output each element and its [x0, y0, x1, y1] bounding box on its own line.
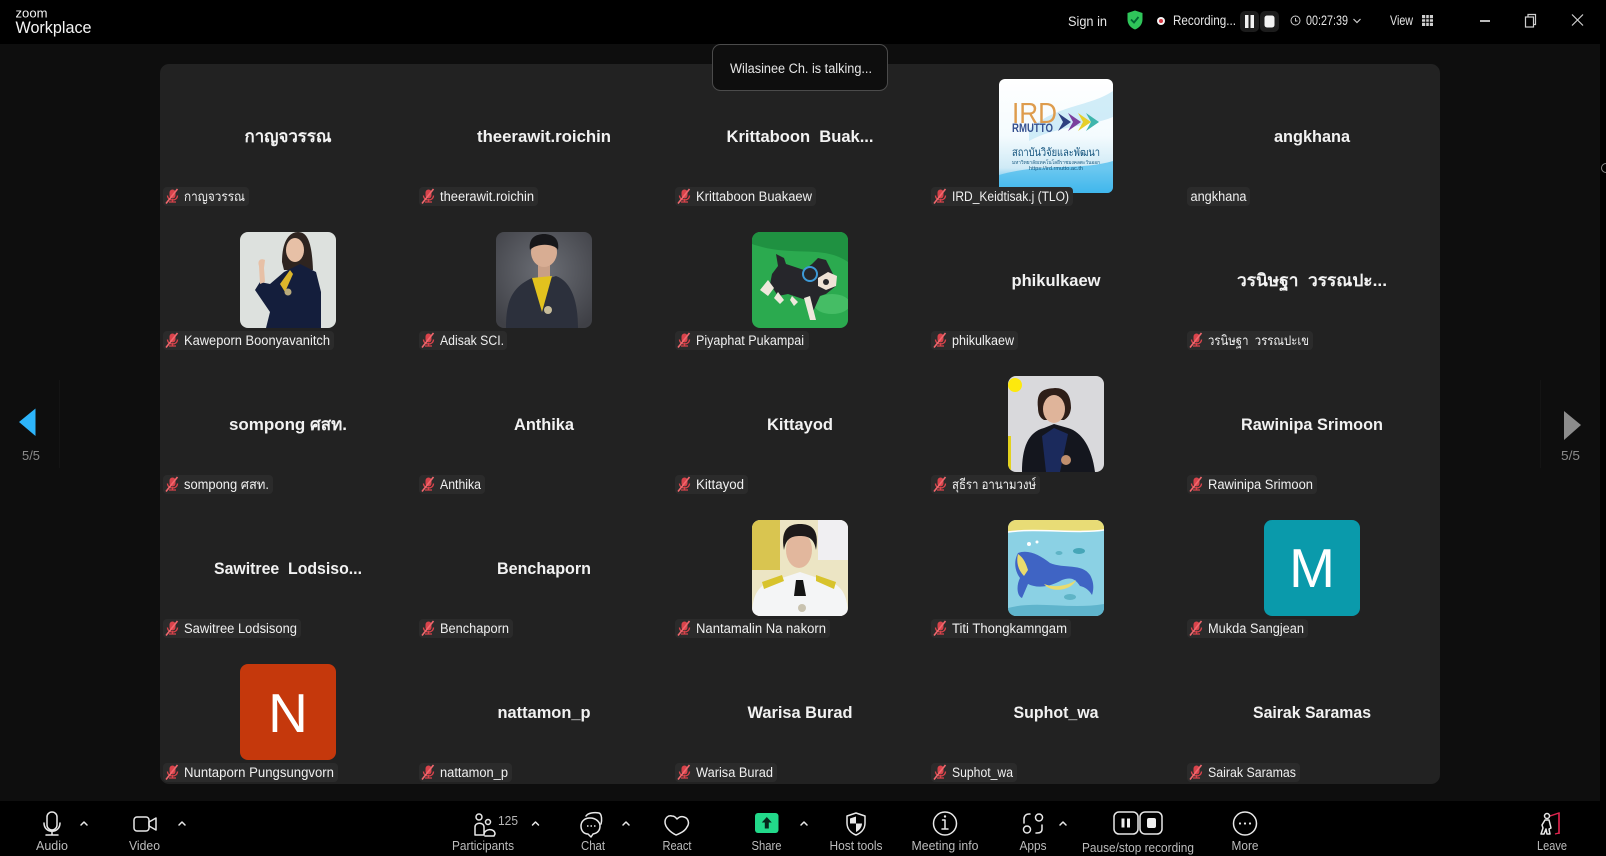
tile: Rawinipa Srimoon — [1187, 415, 1383, 494]
logo: zoom Workplace — [16, 6, 92, 37]
tile: Nantamalin Na nakorn — [675, 520, 848, 638]
tile: สุธีรา อานามวงษ์ — [931, 376, 1104, 494]
sign in: Sign in — [1068, 14, 1107, 29]
tile: กาญจวรรณ — [163, 127, 332, 206]
tile: nattamon_p — [419, 703, 590, 782]
avatar: IRD RMUTTO logo: IRD — [1012, 98, 1057, 130]
participants button: Participants — [452, 838, 514, 853]
logo: zoom Workplace: Workplace — [16, 18, 92, 37]
callout: who is talking — [712, 44, 888, 90]
tile: sompong ศสท.: sompong ศสท. — [184, 477, 269, 492]
react button: React — [662, 838, 692, 853]
avatar: letter M: M — [1289, 537, 1335, 599]
tile: Suphot_wa: Suphot_wa — [1014, 703, 1099, 722]
tile: Piyaphat Pukampai: Piyaphat Pukampai — [696, 333, 804, 348]
meeting info button — [912, 812, 978, 853]
avatar: IRD RMUTTO logo: สถาบันวิจัยและพัฒนา — [1012, 147, 1100, 159]
tile: angkhana: angkhana — [1274, 127, 1351, 146]
tile: Krittaboon Buakaew: Krittaboon Buakaew — [696, 189, 812, 204]
right page arrow — [1540, 380, 1581, 468]
tile: Benchaporn: Benchaporn — [440, 621, 509, 636]
bottom toolbar — [0, 801, 1606, 856]
tile: IRD_Keidtisak.j (TLO) — [931, 79, 1113, 206]
avatar: IRD RMUTTO logo: https://ird.rmutto.ac.th — [1029, 166, 1083, 172]
tile: Warisa Burad: Warisa Burad — [748, 703, 852, 722]
avatar: IRD RMUTTO logo — [999, 79, 1113, 193]
chat button: Chat — [581, 838, 605, 853]
tile: Warisa Burad — [675, 703, 852, 782]
avatar: man in dark suit — [496, 232, 592, 328]
tile: สุธีรา อานามวงษ์: สุธีรา อานามวงษ์ — [952, 476, 1036, 493]
avatar: whale illustration — [1008, 520, 1104, 616]
chat button — [581, 813, 629, 853]
tile: Sawitree Lodsisong — [163, 559, 362, 638]
avatar: letter M — [1264, 520, 1360, 616]
tile: Adisak SCI. — [419, 232, 592, 350]
more button — [1232, 812, 1258, 853]
tile: angkhana: angkhana — [1190, 189, 1247, 204]
tile: Suphot_wa: Suphot_wa — [952, 765, 1013, 780]
logo: zoom Workplace: zoom — [16, 6, 48, 20]
view menu — [1390, 13, 1433, 28]
tile: Nantamalin Na nakorn: Nantamalin Na nakorn — [696, 621, 826, 636]
tile: Titi Thongkamngam — [931, 520, 1104, 638]
tile: theerawit.roichin: theerawit.roichin — [477, 127, 611, 146]
tile: Sawitree Lodsisong: Sawitree Lodsiso... — [214, 559, 362, 578]
icon: security shield — [1128, 10, 1142, 30]
react button — [662, 816, 692, 853]
tile: nattamon_p: nattamon_p — [498, 703, 590, 722]
tile: วรนิษฐา วรรณปะเข — [1187, 271, 1387, 350]
right page arrow: 5/5 — [1561, 449, 1580, 463]
more button: More — [1232, 838, 1258, 853]
tile: Adisak SCI.: Adisak SCI. — [440, 333, 504, 348]
host tools button: Host tools — [830, 838, 883, 853]
tile: phikulkaew: phikulkaew — [952, 333, 1014, 348]
tile: Nuntaporn Pungsungvorn — [163, 664, 338, 782]
tile: phikulkaew: phikulkaew — [1012, 271, 1101, 290]
video button — [129, 817, 185, 853]
tile: กาญจวรรณ: กาญจวรรณ — [184, 189, 245, 204]
avatar: green dog illustration — [752, 232, 850, 328]
tile: Rawinipa Srimoon: Rawinipa Srimoon — [1208, 477, 1313, 492]
tile: Kittayod: Kittayod — [696, 477, 744, 492]
pause/stop recording button: Pause/stop recording — [1082, 840, 1194, 855]
tile: Kittayod: Kittayod — [767, 415, 833, 434]
tile: sompong ศสท.: sompong ศสท. — [229, 415, 347, 434]
tile: กาญจวรรณ: กาญจวรรณ — [244, 127, 332, 147]
tile: theerawit.roichin — [419, 127, 611, 206]
tile: Sawitree Lodsisong: Sawitree Lodsisong — [184, 621, 297, 636]
tile: Nuntaporn Pungsungvorn: Nuntaporn Pungsungvorn — [184, 765, 334, 780]
avatar: IRD RMUTTO logo: RMUTTO — [1012, 121, 1053, 135]
tile: วรนิษฐา วรรณปะเข: วรนิษฐา วรรณปะเข — [1208, 333, 1309, 349]
tile: Benchaporn — [419, 559, 591, 638]
audio button — [36, 812, 87, 853]
participants button — [452, 814, 538, 853]
top bar — [16, 6, 1583, 37]
tile: Rawinipa Srimoon: Rawinipa Srimoon — [1241, 415, 1383, 434]
callout: who is talking: Wilasinee Ch. is talking... — [730, 61, 872, 76]
video button: Video — [129, 838, 160, 853]
avatar: woman in white uniform — [752, 520, 848, 616]
apps button — [1020, 814, 1066, 853]
tile: Mukda Sangjean — [1187, 520, 1360, 638]
tile: Mukda Sangjean: Mukda Sangjean — [1208, 621, 1304, 636]
apps button: Apps — [1020, 838, 1047, 853]
tile: theerawit.roichin: theerawit.roichin — [440, 189, 534, 204]
tile: Benchaporn: Benchaporn — [497, 559, 591, 578]
tile: Sairak Saramas: Sairak Saramas — [1208, 765, 1296, 780]
timer: 00:27:39 — [1306, 13, 1348, 28]
left page arrow: 5/5 — [22, 449, 40, 463]
participants button: 125 — [498, 814, 518, 828]
tile: Warisa Burad: Warisa Burad — [696, 765, 773, 780]
tile: วรนิษฐา วรรณปะเข: วรนิษฐา วรรณปะ... — [1237, 271, 1387, 292]
avatar: woman in navy blazer — [240, 232, 336, 328]
tile: Kaweporn Boonyavanitch — [163, 232, 336, 350]
tile: Anthika: Anthika — [440, 477, 481, 492]
panel: participant gallery — [160, 64, 1440, 784]
avatar: letter N: N — [268, 682, 308, 744]
host tools button — [830, 813, 883, 853]
tile: IRD_Keidtisak.j (TLO): IRD_Keidtisak.j (TLO) — [952, 189, 1069, 204]
recording status: Recording... — [1173, 13, 1236, 28]
view menu: View — [1390, 13, 1413, 28]
window controls — [1480, 14, 1583, 27]
share button — [752, 813, 807, 853]
tile: Titi Thongkamngam: Titi Thongkamngam — [952, 621, 1067, 636]
tile: Piyaphat Pukampai — [675, 232, 850, 350]
avatar: IRD RMUTTO logo: มหาวิทยาลัยเทคโนโลยีราชมงคลตะวันออก — [1012, 159, 1100, 166]
audio button: Audio — [36, 838, 68, 853]
tile: Krittaboon Buakaew: Krittaboon Buak... — [726, 127, 874, 146]
avatar: letter N — [240, 664, 336, 760]
tile: Kittayod — [675, 415, 833, 494]
leave button — [1537, 813, 1567, 853]
tile: phikulkaew — [931, 271, 1101, 350]
leave button: Leave — [1537, 838, 1567, 853]
tile: angkhana — [1187, 127, 1351, 206]
tile: sompong ศสท. — [163, 415, 347, 494]
tile: nattamon_p: nattamon_p — [440, 765, 508, 780]
tile: Suphot_wa — [931, 703, 1099, 782]
tile: Krittaboon Buakaew — [675, 127, 874, 206]
tile: Anthika — [419, 415, 575, 494]
stop button — [1260, 11, 1279, 32]
tile: Kaweporn Boonyavanitch: Kaweporn Boonyavanitch — [184, 333, 330, 348]
meeting info button: Meeting info — [912, 838, 978, 853]
tile: Anthika: Anthika — [514, 415, 575, 434]
share button: Share — [752, 838, 782, 853]
edge cursor — [1602, 164, 1606, 172]
tile: Sairak Saramas: Sairak Saramas — [1253, 703, 1371, 722]
pause button — [1240, 11, 1259, 32]
pause/stop recording button — [1082, 812, 1194, 855]
left page arrow — [19, 380, 60, 468]
tile: Sairak Saramas — [1187, 703, 1371, 782]
avatar: woman with badge — [1008, 376, 1104, 472]
